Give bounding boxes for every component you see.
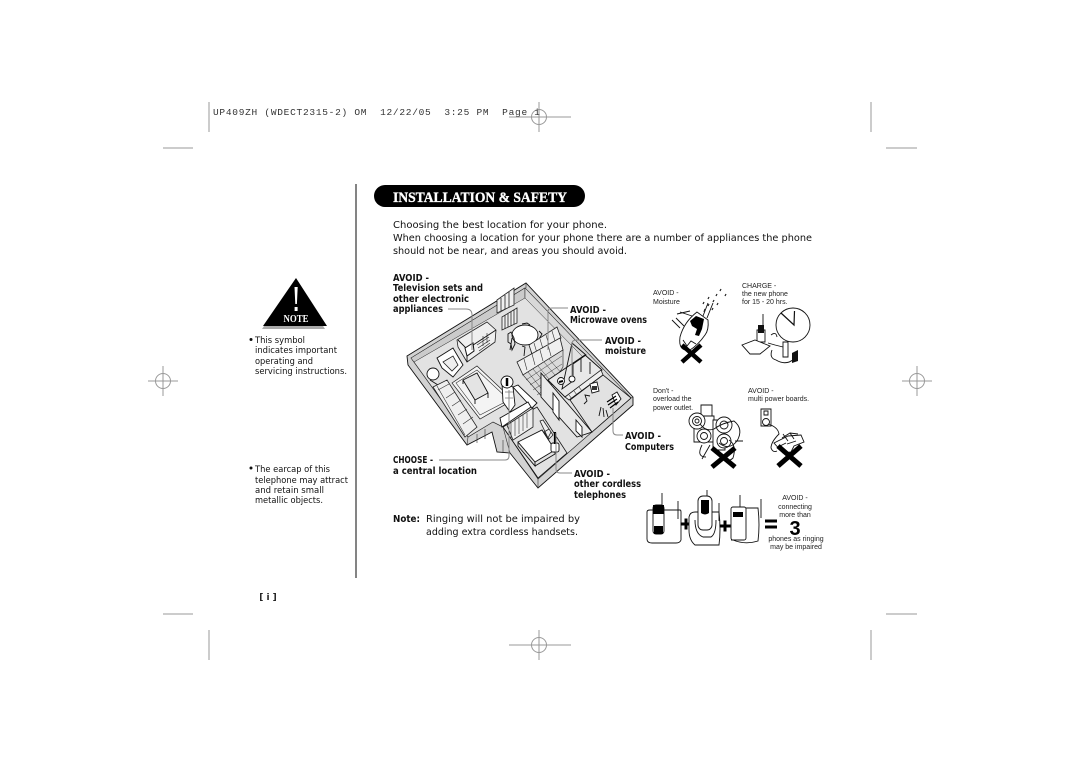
coffee table <box>463 373 488 400</box>
connecting limit note: phones as ringing <box>768 536 824 543</box>
sofa <box>433 380 477 437</box>
grey leader lines <box>448 309 472 350</box>
bed <box>518 430 555 462</box>
plus sign <box>720 520 730 532</box>
connecting limit note: 3 <box>789 518 801 540</box>
bedroom floor <box>503 407 567 478</box>
overload caption: power outlet. <box>653 405 693 412</box>
moisture caption: AVOID - <box>653 290 679 297</box>
page number: [ i ] <box>259 593 277 603</box>
kitchen tiled floor <box>523 350 563 398</box>
charge caption <box>742 283 788 306</box>
note: symbol text: indicates important <box>255 346 337 356</box>
callout: moisture: moisture <box>605 346 646 357</box>
icon: cordless phone 3 <box>731 495 761 543</box>
window <box>497 288 514 313</box>
callout: moisture: AVOID - <box>605 336 641 347</box>
callout: central location <box>393 455 477 477</box>
note: earcap text: and retain small <box>255 486 324 496</box>
charge caption: CHARGE - <box>742 283 777 290</box>
overload caption: Don't - <box>653 388 674 395</box>
connecting limit note: AVOID - <box>782 495 808 502</box>
icon: overloaded outlet <box>689 405 743 467</box>
connecting limit note <box>768 495 824 551</box>
icon: power boards <box>761 409 804 466</box>
callout: cordless telephones: telephones <box>574 490 626 501</box>
connecting limit note: connecting <box>778 504 812 511</box>
hall walls <box>513 385 537 408</box>
intro text: should not be near, and areas you should avoid. <box>393 246 627 257</box>
rug <box>452 366 513 419</box>
note warning icon <box>262 278 327 329</box>
note: symbol text <box>250 336 347 377</box>
bedroom closet <box>507 408 533 440</box>
dining table and chairs <box>512 325 538 345</box>
callout: television sets: AVOID - <box>393 273 429 284</box>
intro text: When choosing a location for your phone there are a number of appliances the phone <box>393 233 812 244</box>
radiator <box>502 308 517 330</box>
overload caption: overload the <box>653 396 692 403</box>
bathroom <box>548 355 602 397</box>
callout: cordless telephones: other cordless <box>574 479 641 490</box>
charge caption: the new phone <box>742 291 788 298</box>
ringing note <box>393 514 580 538</box>
back wall faces <box>411 288 525 362</box>
note: earcap text <box>250 465 348 506</box>
icon: wet phone <box>672 289 726 362</box>
power board caption: multi power boards. <box>748 396 809 403</box>
callout: moisture <box>605 336 646 357</box>
computer room <box>570 375 631 432</box>
connecting limit note: more than <box>779 512 811 519</box>
TV cabinet <box>457 322 496 362</box>
note: earcap text: telephone may attract <box>255 476 348 486</box>
callout: television sets: other electronic <box>393 294 469 305</box>
callout: computers: Computers <box>625 442 674 453</box>
callout: television sets: Television sets and <box>393 283 483 294</box>
plus sign <box>680 518 692 530</box>
callout: television sets: appliances <box>393 304 443 315</box>
callout: microwave ovens: Microwave ovens <box>570 315 647 326</box>
power board caption <box>748 388 809 403</box>
floor <box>411 288 631 479</box>
callout: cordless telephones <box>574 469 641 501</box>
floor plan illustration <box>407 283 633 488</box>
icon: cordless phone 2 <box>689 490 720 545</box>
callout: microwave ovens: AVOID - <box>570 305 606 316</box>
callout: central location: a central location <box>393 466 477 477</box>
crop marks and registration targets <box>148 102 932 660</box>
outer walls <box>407 283 633 488</box>
intro text <box>393 220 812 257</box>
lower kitchen counter <box>517 338 563 375</box>
ringing note: adding extra cordless handsets. <box>426 527 578 538</box>
callout: computers <box>625 431 674 453</box>
charge caption: for 15 - 20 hrs. <box>742 299 788 306</box>
intro text: Choosing the best location for your phone. <box>393 220 607 231</box>
callout: cordless telephones: AVOID - <box>574 469 610 480</box>
callout: central location: CHOOSE - <box>393 455 433 466</box>
note warning icon: NOTE <box>284 314 308 325</box>
central phone stand <box>502 383 515 412</box>
note: symbol text: operating and <box>255 357 313 367</box>
armchair <box>437 348 463 377</box>
moisture caption: Moisture <box>653 299 680 306</box>
equals sign <box>765 521 777 527</box>
print slug header: UP409ZH (WDECT2315-2) OM 12/22/05 3:25 PM Page i <box>213 107 540 118</box>
title banner <box>374 185 585 207</box>
icon: cordless phone 1 <box>647 493 681 543</box>
callout: microwave ovens <box>570 305 647 326</box>
upper kitchen counter <box>529 327 561 357</box>
note: symbol text: This symbol <box>254 336 305 346</box>
title banner: INSTALLATION & SAFETY <box>393 190 567 206</box>
callout: television sets <box>393 273 483 315</box>
power board caption: AVOID - <box>748 388 774 395</box>
note: symbol text: servicing instructions. <box>255 367 347 377</box>
bedside phone <box>551 443 559 452</box>
ringing note: Ringing will not be impaired by <box>426 514 580 525</box>
note: earcap text: The earcap of this <box>254 465 330 475</box>
connecting limit note: may be impaired <box>770 544 822 551</box>
overload caption <box>653 388 693 412</box>
icon: charger and clock <box>742 308 810 363</box>
note: earcap text: metallic objects. <box>255 496 323 506</box>
moisture caption <box>653 290 680 306</box>
callout: computers: AVOID - <box>625 431 661 442</box>
lamp <box>427 368 439 380</box>
vertical column divider <box>355 184 357 578</box>
ringing note: Note: <box>393 514 420 525</box>
wall panel lines <box>477 429 503 452</box>
partition wall <box>541 373 592 437</box>
